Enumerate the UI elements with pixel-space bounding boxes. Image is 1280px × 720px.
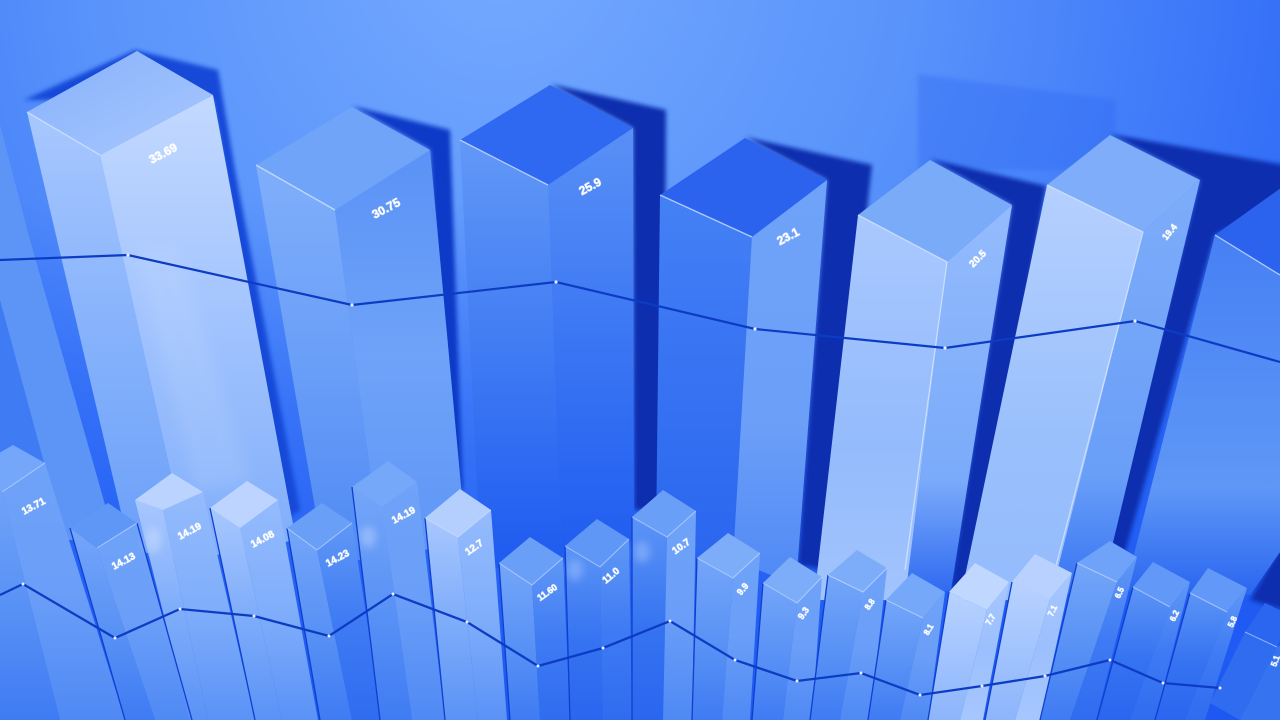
cast shadows of the large bars — [24, 50, 1280, 610]
value label: 5.8 — [1226, 615, 1239, 629]
value label: 33.69 — [147, 140, 180, 167]
value label: 6.2 — [1168, 609, 1181, 623]
value label: 14.19 — [176, 521, 204, 543]
small bar 9 — [565, 519, 632, 720]
large bar 3 — [460, 85, 634, 570]
value label: 7.7 — [984, 612, 998, 627]
small bar 19 — [1155, 568, 1247, 720]
value label: 23.1 — [775, 225, 802, 248]
small bar 10 — [632, 490, 696, 720]
value label: 11.0 — [601, 566, 623, 586]
large bar 5 — [814, 160, 1012, 600]
small bar 13 — [810, 550, 887, 720]
large bar 6 — [960, 135, 1200, 600]
small bar 5 — [287, 503, 382, 720]
value label: 20.5 — [967, 248, 989, 270]
edge highlights on large bars — [27, 112, 1280, 570]
large bar 4 — [656, 138, 827, 585]
small bar 16 — [985, 554, 1072, 720]
value label: 30.75 — [370, 195, 403, 222]
small bar 7 — [425, 489, 507, 720]
value label: 14.19 — [390, 505, 418, 527]
small bar 12 — [752, 557, 822, 720]
value label: 12.7 — [463, 538, 486, 558]
value label: 8.8 — [863, 597, 877, 612]
large bar 1 — [27, 51, 296, 560]
small bar 15 — [928, 563, 1009, 720]
value label: 14.23 — [324, 548, 352, 570]
small bar 8 — [499, 537, 570, 720]
value label: 9.9 — [735, 581, 751, 597]
value label: 25.9 — [577, 175, 604, 198]
large bar 2 — [256, 107, 466, 560]
small bar 1 — [0, 445, 125, 720]
value label: 11.60 — [535, 582, 559, 603]
value label: 19.4 — [1160, 222, 1179, 242]
large bar 0 (partly off-canvas) — [0, 125, 115, 540]
value label: 6.5 — [1113, 586, 1126, 600]
small bar 20 — [1210, 603, 1280, 720]
small bar 17 — [1040, 541, 1137, 720]
value label: 14.08 — [249, 529, 277, 551]
pale top-edge highlights on small bars — [2, 463, 1277, 647]
trend line: large bars — [0, 253, 1280, 362]
small bar 2 — [70, 503, 192, 720]
value label: 14.13 — [110, 551, 138, 573]
small bar 14 — [868, 573, 945, 720]
small bar 3 — [135, 473, 255, 720]
large bar 7 (partly off-canvas) — [1125, 185, 1280, 595]
value label: 10.7 — [670, 537, 693, 557]
value label: 13.71 — [20, 496, 48, 518]
value label: 9.3 — [796, 605, 811, 621]
small bar 6 — [352, 461, 445, 720]
small bar 4 — [210, 481, 318, 720]
small bar 18 — [1097, 562, 1190, 720]
trend line: small bars — [0, 582, 1222, 696]
value label: 7.1 — [1046, 604, 1059, 618]
small bar 11 — [692, 533, 760, 720]
value label: 8.1 — [922, 622, 936, 637]
dark seams between small bars — [70, 487, 1190, 720]
